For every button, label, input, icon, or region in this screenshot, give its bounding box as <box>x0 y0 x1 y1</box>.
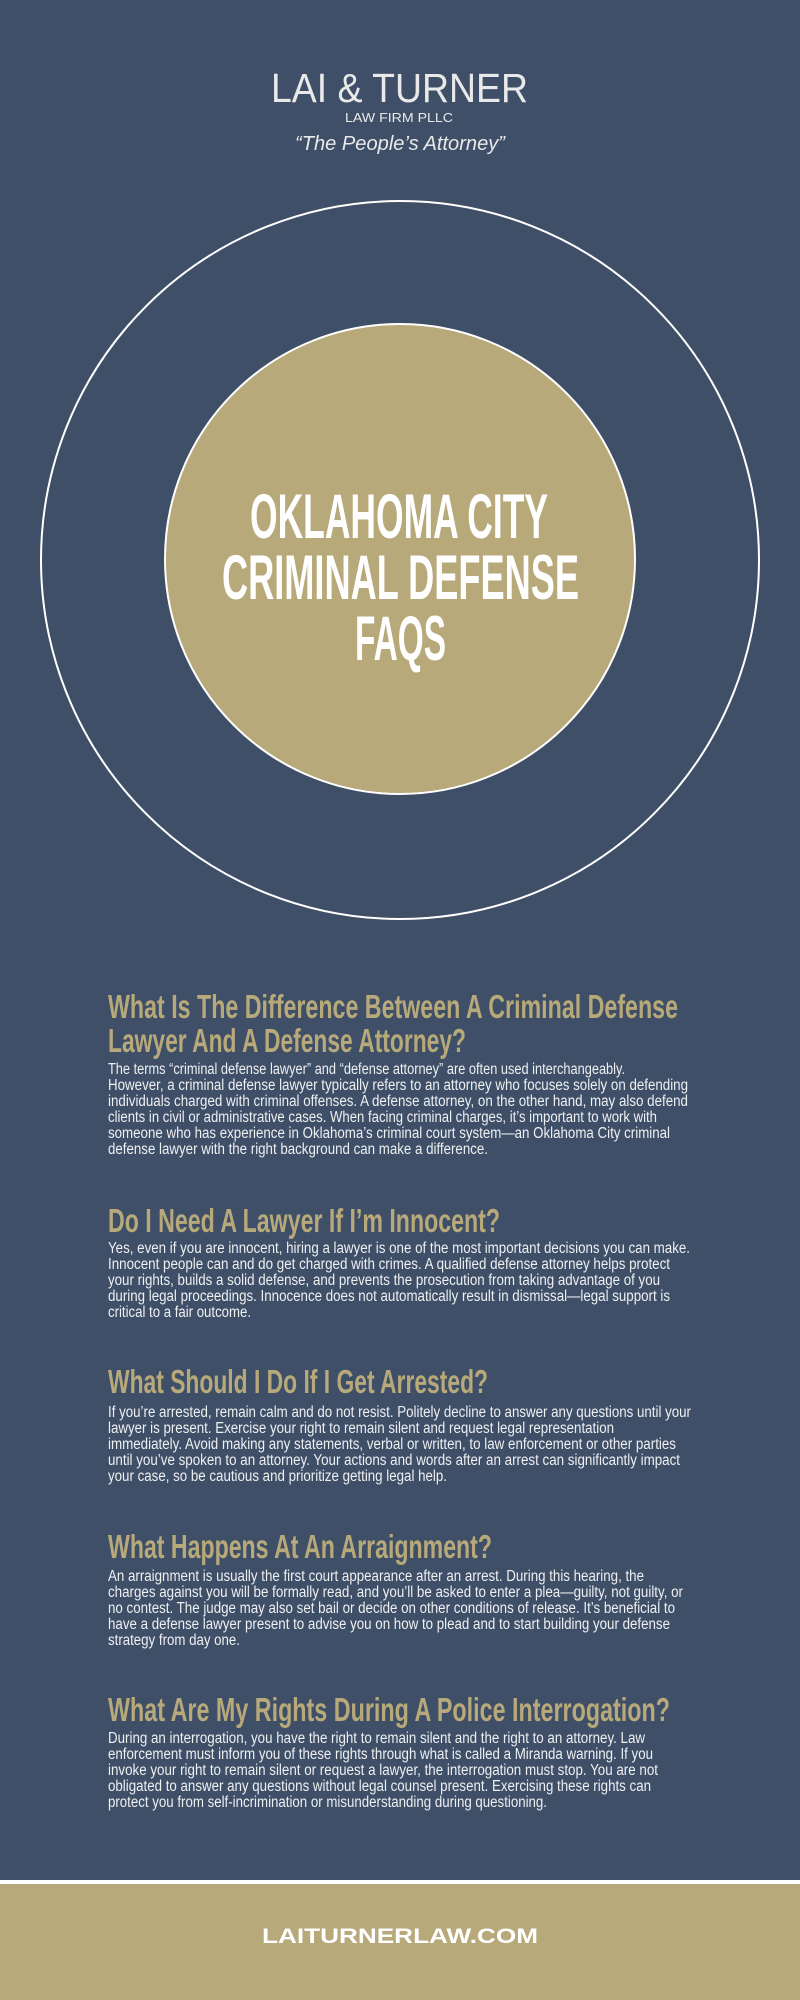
section 2: Innocent people can and do get charged with crimes. A qualified defense attorney helps protect <box>108 1256 671 1273</box>
section 1: someone who has experience in Oklahoma’s criminal court system—an Oklahoma City criminal <box>108 1125 670 1142</box>
title: OKLAHOMA CITY <box>250 482 548 552</box>
section 5: protect you from self-incrimination or misunderstanding during questioning. <box>108 1794 547 1811</box>
section 5: obligated to answer any questions without legal counsel present. Exercising these rights can <box>108 1778 651 1795</box>
section 2: critical to a fair outcome. <box>108 1304 251 1321</box>
section 5: During an interrogation, you have the right to remain silent and the right to an attorney. Law <box>108 1730 646 1747</box>
section 3 <box>108 1363 691 1485</box>
section 5: enforcement must inform you of these rights through what is called a Miranda warning. If you <box>108 1746 653 1763</box>
section 3: If you’re arrested, remain calm and do not resist. Politely decline to answer any questions until your <box>108 1404 691 1421</box>
section 2: Do I Need A Lawyer If I’m Innocent? <box>108 1202 500 1239</box>
title <box>222 482 579 674</box>
section 1: However, a criminal defense lawyer typically refers to an attorney who focuses solely on defending <box>108 1077 688 1094</box>
inner circle with title <box>165 324 635 794</box>
logo: LAI & TURNER <box>271 65 528 111</box>
section 1 <box>108 988 688 1158</box>
section 5 <box>108 1691 670 1811</box>
section 2: during legal proceedings. Innocence does not automatically result in dismissal—legal support is <box>108 1288 670 1305</box>
section 1: clients in civil or administrative cases. When facing criminal charges, it’s important to work with <box>108 1109 657 1126</box>
outer circle <box>41 201 759 919</box>
section 4: no contest. The judge may also set bail or decide on other conditions of release. It’s beneficial to <box>108 1600 675 1617</box>
section 3: immediately. Avoid making any statements, verbal or written, to law enforcement or other parties <box>108 1436 676 1453</box>
section 1: defense lawyer with the right background can make a difference. <box>108 1141 488 1158</box>
section 4: What Happens At An Arraignment? <box>108 1528 492 1565</box>
title: FAQS <box>355 604 446 674</box>
section 3: lawyer is present. Exercise your right to remain silent and request legal representation <box>108 1420 614 1437</box>
section 1: Lawyer And A Defense Attorney? <box>108 1022 466 1059</box>
section 2 <box>108 1202 690 1321</box>
logo: LAW FIRM PLLC <box>345 111 453 125</box>
section 4: charges against you will be formally read, and you’ll be asked to enter a plea—guilty, not guilty, or <box>108 1584 683 1601</box>
logo <box>271 65 528 155</box>
section 1: individuals charged with criminal offenses. A defense attorney, on the other hand, may also defend <box>108 1093 688 1110</box>
section 4: have a defense lawyer present to advise you on how to plead and to start building your defense <box>108 1616 670 1633</box>
section 5: invoke your right to remain silent or request a lawyer, the interrogation must stop. You are not <box>108 1762 659 1779</box>
section 3: What Should I Do If I Get Arrested? <box>108 1363 488 1400</box>
section 3: your case, so be cautious and prioritize getting legal help. <box>108 1468 447 1485</box>
section 4 <box>108 1528 683 1649</box>
section 1: The terms “criminal defense lawyer” and “defense attorney” are often used interchangeably. <box>108 1061 625 1078</box>
logo: “The People’s Attorney” <box>295 133 506 155</box>
section 3: until you’ve spoken to an attorney. Your actions and words after an arrest can significantly impact <box>108 1452 681 1469</box>
footer url: LAITURNERLAW.COM <box>262 1925 538 1948</box>
section 2: your rights, builds a solid defense, and prevents the prosecution from taking advantage of you <box>108 1272 660 1289</box>
section 4: An arraignment is usually the first court appearance after an arrest. During this hearing, the <box>108 1568 644 1585</box>
section 4: strategy from day one. <box>108 1632 240 1649</box>
footer <box>0 1880 800 2000</box>
section 2: Yes, even if you are innocent, hiring a lawyer is one of the most important decisions you can make. <box>108 1240 690 1257</box>
